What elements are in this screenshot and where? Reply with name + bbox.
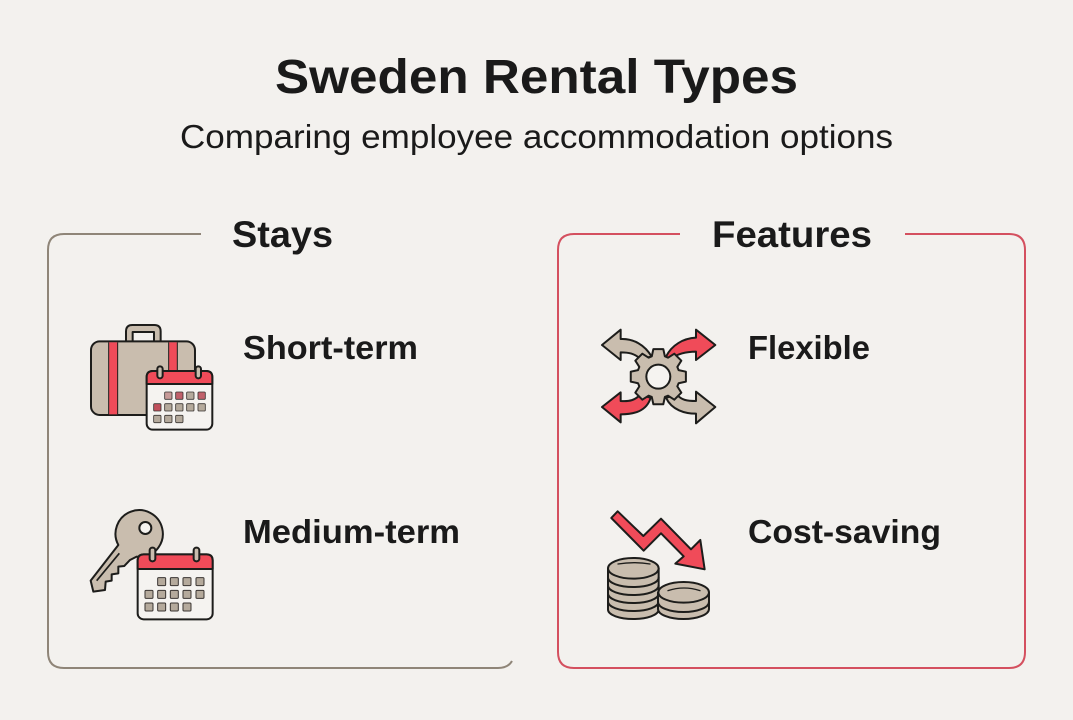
icon: gear with four arrows	[602, 330, 715, 423]
panel border: stays	[48, 234, 512, 668]
subtitle: Comparing employee accommodation options	[180, 118, 893, 155]
panel: stays	[48, 214, 512, 668]
label: flexible: Flexible	[748, 329, 870, 366]
icon: suitcase and calendar	[91, 325, 212, 430]
icon: key and calendar	[91, 510, 213, 619]
heading: features: Features	[712, 214, 872, 255]
icon: falling arrow and coins	[608, 511, 709, 619]
panel: features	[558, 214, 1025, 668]
heading: stays: Stays	[232, 214, 333, 255]
label: medium-term: Medium-term	[243, 513, 460, 550]
title: Sweden Rental Types	[275, 51, 798, 104]
panel border: features	[558, 234, 1025, 668]
label: cost-saving: Cost-saving	[748, 513, 941, 550]
label: short-term: Short-term	[243, 329, 418, 366]
